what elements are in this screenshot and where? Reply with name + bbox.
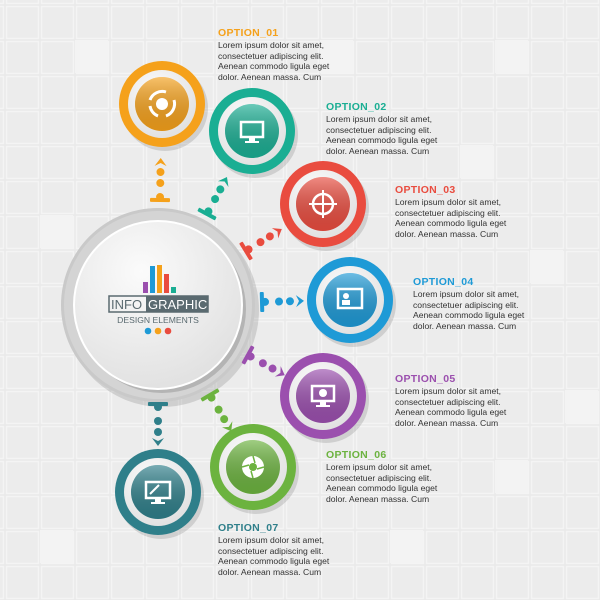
text: option 01: Lorem ipsum dolor sit amet, consectetuer adipiscing elit. Aenean commodo ligula eget dolor. Aenean massa. Cum bbox=[218, 40, 329, 82]
icon: bar chart bbox=[143, 265, 176, 293]
logo text: GRAPHIC bbox=[148, 297, 207, 312]
text: option 01: OPTION_01 bbox=[218, 27, 278, 39]
arrows bbox=[148, 158, 304, 446]
logo text: INFO bbox=[111, 297, 142, 312]
text: option 06: OPTION_06 bbox=[326, 449, 386, 461]
text: option 04: Lorem ipsum dolor sit amet, consectetuer adipiscing elit. Aenean commodo ligula eget dolor. Aenean massa. Cum bbox=[413, 289, 524, 331]
option circles bbox=[119, 61, 208, 151]
main circle bbox=[61, 208, 259, 407]
text: option 02: Lorem ipsum dolor sit amet, consectetuer adipiscing elit. Aenean commodo ligula eget dolor. Aenean massa. Cum bbox=[326, 114, 437, 156]
text: option 02: OPTION_02 bbox=[326, 101, 386, 113]
logo text: DESIGN ELEMENTS bbox=[117, 315, 199, 325]
text: option 03: OPTION_03 bbox=[395, 184, 455, 196]
text: option 07: OPTION_07 bbox=[218, 522, 278, 534]
text: option 05: OPTION_05 bbox=[395, 373, 455, 385]
logo text bbox=[109, 296, 208, 334]
text: option 07: Lorem ipsum dolor sit amet, consectetuer adipiscing elit. Aenean commodo ligula eget dolor. Aenean massa. Cum bbox=[218, 535, 329, 577]
text: option 03: Lorem ipsum dolor sit amet, consectetuer adipiscing elit. Aenean commodo ligula eget dolor. Aenean massa. Cum bbox=[395, 197, 506, 239]
text: option 05: Lorem ipsum dolor sit amet, consectetuer adipiscing elit. Aenean commodo ligula eget dolor. Aenean massa. Cum bbox=[395, 386, 506, 428]
text: option 06: Lorem ipsum dolor sit amet, consectetuer adipiscing elit. Aenean commodo ligula eget dolor. Aenean massa. Cum bbox=[326, 462, 437, 504]
text: option 04: OPTION_04 bbox=[413, 276, 473, 288]
